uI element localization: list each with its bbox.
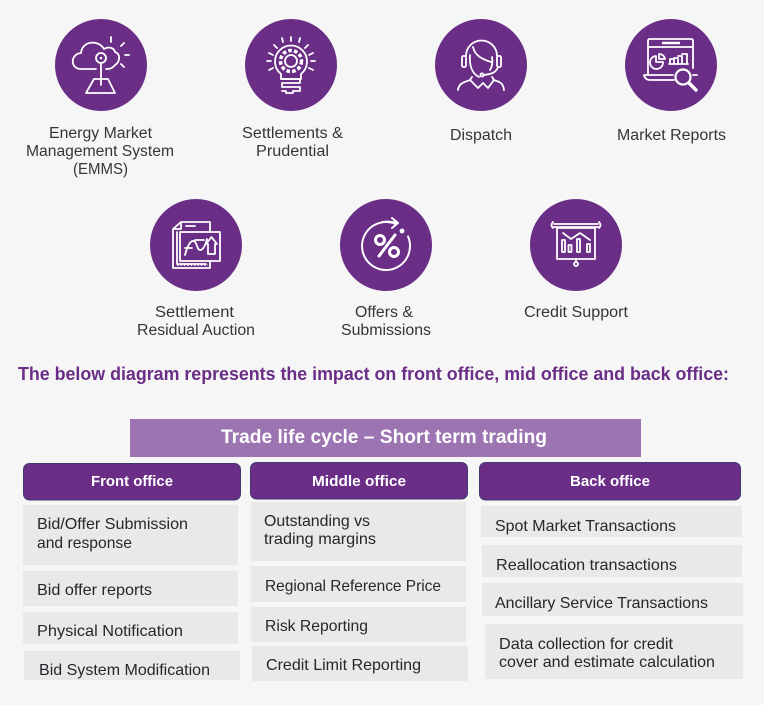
item: Regional Reference Price: [251, 566, 466, 602]
icon: Market Reports: [625, 19, 717, 111]
item: Bid/Offer Submission and response: [23, 505, 238, 565]
label: Energy Market Management System: (EMMS): [73, 161, 128, 178]
label: Settlement Residual Auction: Settlement: [155, 304, 235, 321]
item: Bid System Modification: Bid System Modification: [39, 662, 210, 679]
item: Physical Notification: Physical Notification: [37, 623, 183, 640]
header: Back office: [480, 462, 740, 500]
header: Middle office: Middle office: [312, 473, 406, 490]
icon: Offers and Submissions: [340, 199, 432, 291]
label: Offers and Submissions: [341, 304, 431, 339]
item: Ancillary Service Transactions: [482, 583, 743, 616]
heading: diagram introduction: The below diagram represents the impact on front office, mid office and back office:: [18, 364, 729, 384]
title band: Trade life cycle: [130, 419, 641, 457]
label: Dispatch: Dispatch: [450, 127, 512, 144]
item: Risk Reporting: [251, 607, 466, 642]
label: Settlements and Prudential: Settlements &: [242, 125, 344, 142]
item: Ancillary Service Transactions: Ancillary Service Transactions: [495, 595, 708, 612]
label: Market Reports: Market Reports: [617, 127, 726, 144]
label: Energy Market Management System: Energy Market: [49, 125, 153, 142]
label: Settlement Residual Auction: [137, 304, 255, 339]
icon: Credit Support: [530, 199, 622, 291]
item: Spot Market Transactions: Spot Market Transactions: [495, 518, 676, 535]
label: Offers and Submissions: Submissions: [341, 322, 431, 339]
item: Credit Limit Reporting: Credit Limit Reporting: [266, 657, 421, 674]
header: Front office: Front office: [91, 473, 173, 490]
item: Bid offer reports: [23, 571, 238, 606]
item: Reallocation transactions: [482, 545, 742, 577]
column: Back office: [480, 462, 743, 679]
label: Settlements and Prudential: [242, 125, 344, 160]
header: Front office: [24, 464, 240, 500]
item: Regional Reference Price: Regional Reference Price: [265, 578, 441, 595]
item: Bid offer reports: Bid offer reports: [37, 582, 152, 599]
label: Energy Market Management System: [26, 125, 174, 178]
label: Credit Support: Credit Support: [524, 304, 629, 321]
header: Back office: Back office: [570, 473, 650, 490]
icon: Energy Market Management System: [55, 19, 147, 111]
item: Outstanding vs trading margins: [251, 502, 466, 561]
item: Risk Reporting: Risk Reporting: [265, 618, 368, 635]
item: Outstanding vs trading margins: trading margins: [264, 531, 376, 548]
icon: Settlement Residual Auction: [150, 199, 242, 291]
item: Physical Notification: [23, 612, 238, 644]
column: Front office: [23, 464, 240, 680]
item: Spot Market Transactions: [481, 506, 742, 537]
label: Energy Market Management System: Management System: [26, 143, 174, 160]
item: Outstanding vs trading margins: Outstanding vs: [264, 513, 370, 530]
item: Bid/Offer Submission and response: Bid/Offer Submission: [37, 516, 188, 533]
column: Middle office: [250, 462, 468, 681]
label: Offers and Submissions: Offers &: [355, 304, 414, 321]
item: Data collection for credit cover and estimate calculation: [485, 624, 743, 679]
item: Data collection for credit cover and estimate calculation: Data collection for credit: [499, 636, 674, 653]
item: Data collection for credit cover and estimate calculation: cover and estimate calculation: [499, 654, 715, 671]
label: Settlement Residual Auction: Residual Auction: [137, 322, 255, 339]
item: Reallocation transactions: Reallocation transactions: [496, 557, 677, 574]
header: Middle office: [250, 462, 468, 499]
item: Credit Limit Reporting: [252, 646, 468, 681]
icon: Settlements and Prudential: [245, 19, 337, 111]
icon: Dispatch: [435, 19, 527, 111]
item: Bid System Modification: [24, 651, 240, 680]
item: Bid/Offer Submission and response: and response: [37, 535, 132, 552]
label: Settlements and Prudential: Prudential: [256, 143, 329, 160]
title band: Trade life cycle: Trade life cycle – Short term trading: [221, 427, 547, 448]
